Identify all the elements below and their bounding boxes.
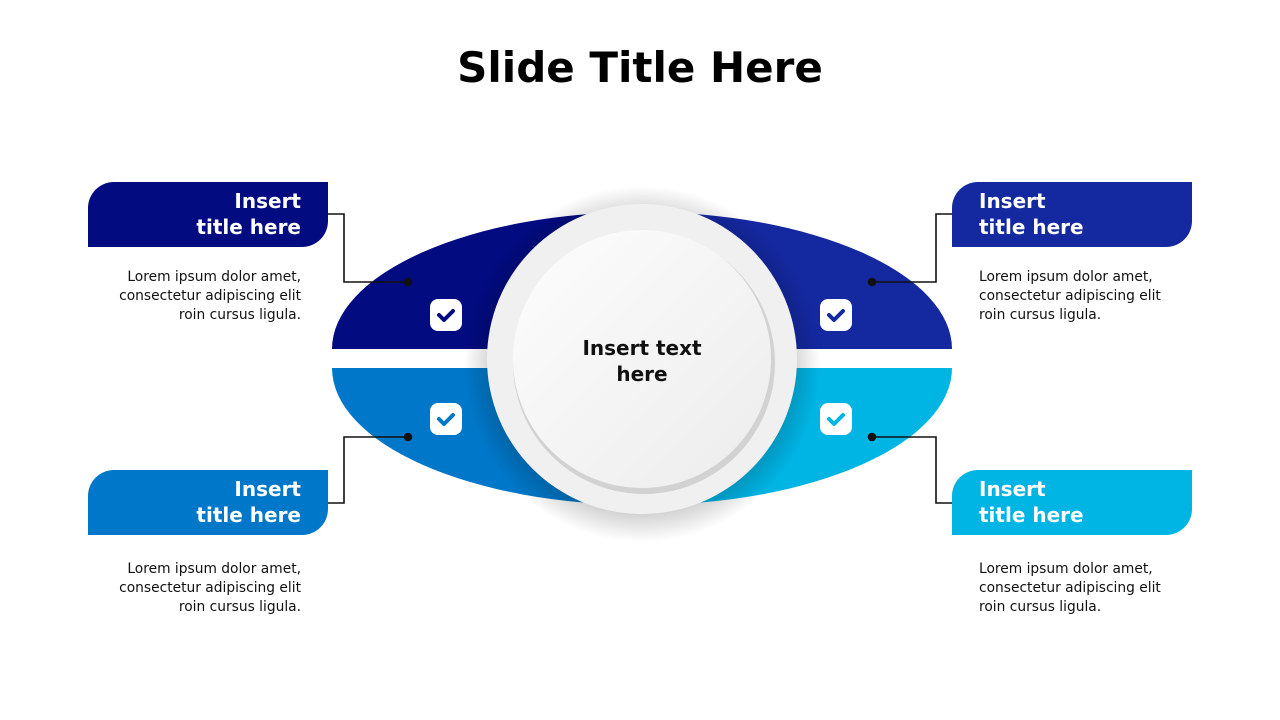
text: bottom-right — [979, 561, 1161, 615]
text: top-left — [119, 269, 301, 323]
text: bottom-left: roin cursus ligula. — [179, 599, 301, 615]
title: Slide Title Here — [457, 43, 823, 92]
text: bottom-left: consectetur adipiscing elit — [119, 580, 301, 596]
box: bottom-right title: title here — [979, 503, 1084, 527]
icon: check top-left — [430, 299, 462, 331]
text: top-right: Lorem ipsum dolor amet, — [979, 269, 1153, 285]
box: bottom-left title — [88, 470, 328, 535]
text: top-right: roin cursus ligula. — [979, 307, 1101, 323]
center circle: Insert text — [582, 336, 702, 360]
icon: check bottom-right — [820, 403, 852, 435]
text: top-right: consectetur adipiscing elit — [979, 288, 1161, 304]
box: top-left title — [88, 182, 328, 247]
box: top-right title: title here — [979, 215, 1084, 239]
icon: check top-right — [820, 299, 852, 331]
text: bottom-left — [119, 561, 301, 615]
connectors — [328, 214, 952, 503]
text: top-left: Lorem ipsum dolor amet, — [127, 269, 301, 285]
text: bottom-right: Lorem ipsum dolor amet, — [979, 561, 1153, 577]
text: bottom-right: consectetur adipiscing elit — [979, 580, 1161, 596]
ellipse quadrants — [332, 212, 952, 505]
box: bottom-right title — [952, 470, 1192, 535]
text: bottom-right: roin cursus ligula. — [979, 599, 1101, 615]
box: bottom-left title: Insert — [234, 477, 301, 501]
icon: check bottom-left — [430, 403, 462, 435]
box: top-left title: title here — [196, 215, 301, 239]
box: top-left title: Insert — [234, 189, 301, 213]
text: top-left: roin cursus ligula. — [179, 307, 301, 323]
center circle: here — [616, 362, 668, 386]
box: top-right title — [952, 182, 1192, 247]
box: bottom-left title: title here — [196, 503, 301, 527]
text: top-left: consectetur adipiscing elit — [119, 288, 301, 304]
box: bottom-right title: Insert — [979, 477, 1046, 501]
diagram — [328, 192, 952, 536]
box: top-right title: Insert — [979, 189, 1046, 213]
center circle — [464, 186, 820, 542]
text: bottom-left: Lorem ipsum dolor amet, — [127, 561, 301, 577]
text: top-right — [979, 269, 1161, 323]
